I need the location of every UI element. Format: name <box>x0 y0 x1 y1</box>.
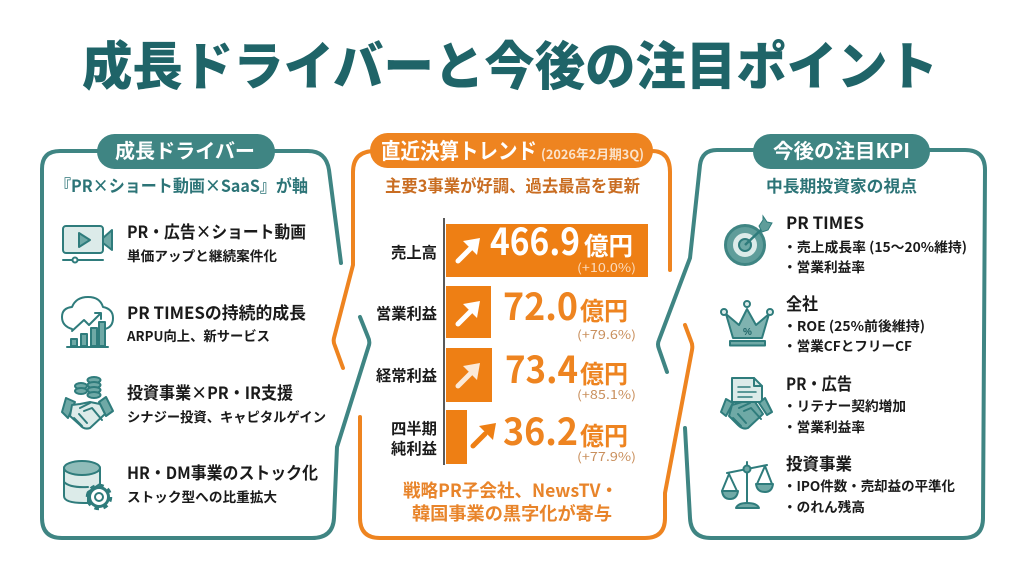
row: quarterly net profit: (+77.9%) <box>577 448 636 465</box>
panel outline: growth drivers <box>42 151 369 538</box>
driver 1 text: PR・広告×ショート動画 <box>127 218 306 243</box>
icon: crown: % <box>743 327 752 338</box>
row: ordinary profit: 億円 <box>580 355 628 391</box>
icon: balance scale <box>722 462 773 508</box>
row: sales <box>391 212 648 277</box>
row: ordinary profit: 73.4 <box>505 340 578 394</box>
subtitle: KPIs to watch: 中長期投資家の視点 <box>766 173 917 197</box>
driver 4 text: ストック型への比重拡大 <box>127 486 278 506</box>
row: operating profit: 72.0 <box>503 277 578 331</box>
title: 成長ドライバーと今後の注目ポイント <box>82 25 938 100</box>
KPI 2 text: ・ROE (25%前後維持) <box>783 315 925 335</box>
driver 2 text: ARPU向上、新サービス <box>126 325 270 345</box>
KPI 2 text <box>783 290 925 355</box>
icon: coins and handshake <box>62 377 113 429</box>
row: quarterly net profit <box>391 402 636 465</box>
heading pill: latest results trend: 直近決算トレンド <box>381 134 537 166</box>
driver 3 text: シナジー投資、キャピタルゲイン <box>127 406 326 426</box>
panel: latest results trend <box>334 133 692 538</box>
conclusion text: 戦略PR子会社、NewsTV・ <box>403 477 618 503</box>
heading pill: latest results trend <box>370 133 653 168</box>
driver 1 text: 単価アップと継続案件化 <box>127 245 278 265</box>
KPI 3 text <box>783 370 906 436</box>
row: quarterly net profit: 純利益 <box>391 437 437 459</box>
KPI 3 text: ・リテナー契約増加 <box>783 395 906 415</box>
row: ordinary profit <box>376 340 636 403</box>
KPI 1 text: ・売上成長率 (15〜20%維持) <box>783 236 967 256</box>
row: ordinary profit: (+85.1%) <box>577 386 636 403</box>
axis <box>443 218 445 465</box>
KPI 3 text: ・営業利益率 <box>783 416 865 436</box>
KPI 4 text <box>783 450 955 516</box>
KPI 2 text: ・営業CFとフリーCF <box>783 335 912 355</box>
row: quarterly net profit: 億円 <box>580 417 628 453</box>
driver 4 text <box>127 459 318 506</box>
row: operating profit <box>376 277 636 343</box>
heading pill: KPIs to watch <box>753 134 930 169</box>
panel: growth drivers <box>42 134 369 538</box>
row: sales: (+10.0%) <box>577 259 636 276</box>
panel outline: KPIs to watch <box>658 150 985 538</box>
icon: target <box>726 216 772 264</box>
heading pill: latest results trend: (2026年2月期3Q) <box>541 144 644 163</box>
icon: database and gear <box>64 461 110 508</box>
heading pill: growth drivers: 成長ドライバー <box>115 135 255 164</box>
icon: cloud growth chart <box>62 297 113 347</box>
panel outline: latest results trend <box>334 151 692 538</box>
driver 2 text <box>126 299 306 345</box>
icon: crown <box>721 301 773 346</box>
KPI 3 text: PR・広告 <box>786 370 852 395</box>
KPI 2 text: 全社 <box>786 290 818 315</box>
KPI 1 text <box>783 209 967 276</box>
row: operating profit: 億円 <box>580 292 628 328</box>
row: operating profit: (+79.6%) <box>577 326 636 343</box>
row: quarterly net profit: 36.2 <box>503 402 578 456</box>
row: operating profit: 営業利益 <box>376 302 437 324</box>
KPI 1 text: ・営業利益率 <box>783 256 865 276</box>
icon: document and handshake <box>721 378 772 429</box>
heading pill: KPIs to watch: 今後の注目KPI <box>773 135 910 164</box>
row: sales: 億円 <box>584 227 633 263</box>
icon: video <box>63 226 112 262</box>
KPI 1 text: PR TIMES <box>786 209 864 234</box>
driver 3 text <box>127 379 326 426</box>
subtitle: latest results trend: 主要3事業が好調、過去最高を更新 <box>385 172 640 197</box>
row: ordinary profit: 経常利益 <box>376 364 437 386</box>
driver 1 text <box>127 218 306 265</box>
row: sales: 466.9 <box>490 212 580 266</box>
row: sales: 売上高 <box>391 241 437 263</box>
KPI 4 text: ・IPO件数・売却益の平準化 <box>783 475 955 495</box>
driver 3 text: 投資事業×PR・IR支援 <box>127 379 293 404</box>
conclusion text <box>403 477 618 526</box>
KPI 4 text: 投資事業 <box>786 450 852 475</box>
heading pill: growth drivers <box>97 134 275 169</box>
conclusion text: 韓国事業の黒字化が寄与 <box>412 500 612 526</box>
KPI 4 text: ・のれん残高 <box>783 496 865 516</box>
bar chart <box>376 212 648 465</box>
panel: KPIs to watch <box>658 134 985 538</box>
driver 2 text: PR TIMESの持続的成長 <box>127 299 306 324</box>
subtitle: growth drivers: 『PR×ショート動画×SaaS』が軸 <box>55 172 308 197</box>
row: quarterly net profit: 四半期 <box>391 417 437 439</box>
driver 4 text: HR・DM事業のストック化 <box>127 459 318 484</box>
